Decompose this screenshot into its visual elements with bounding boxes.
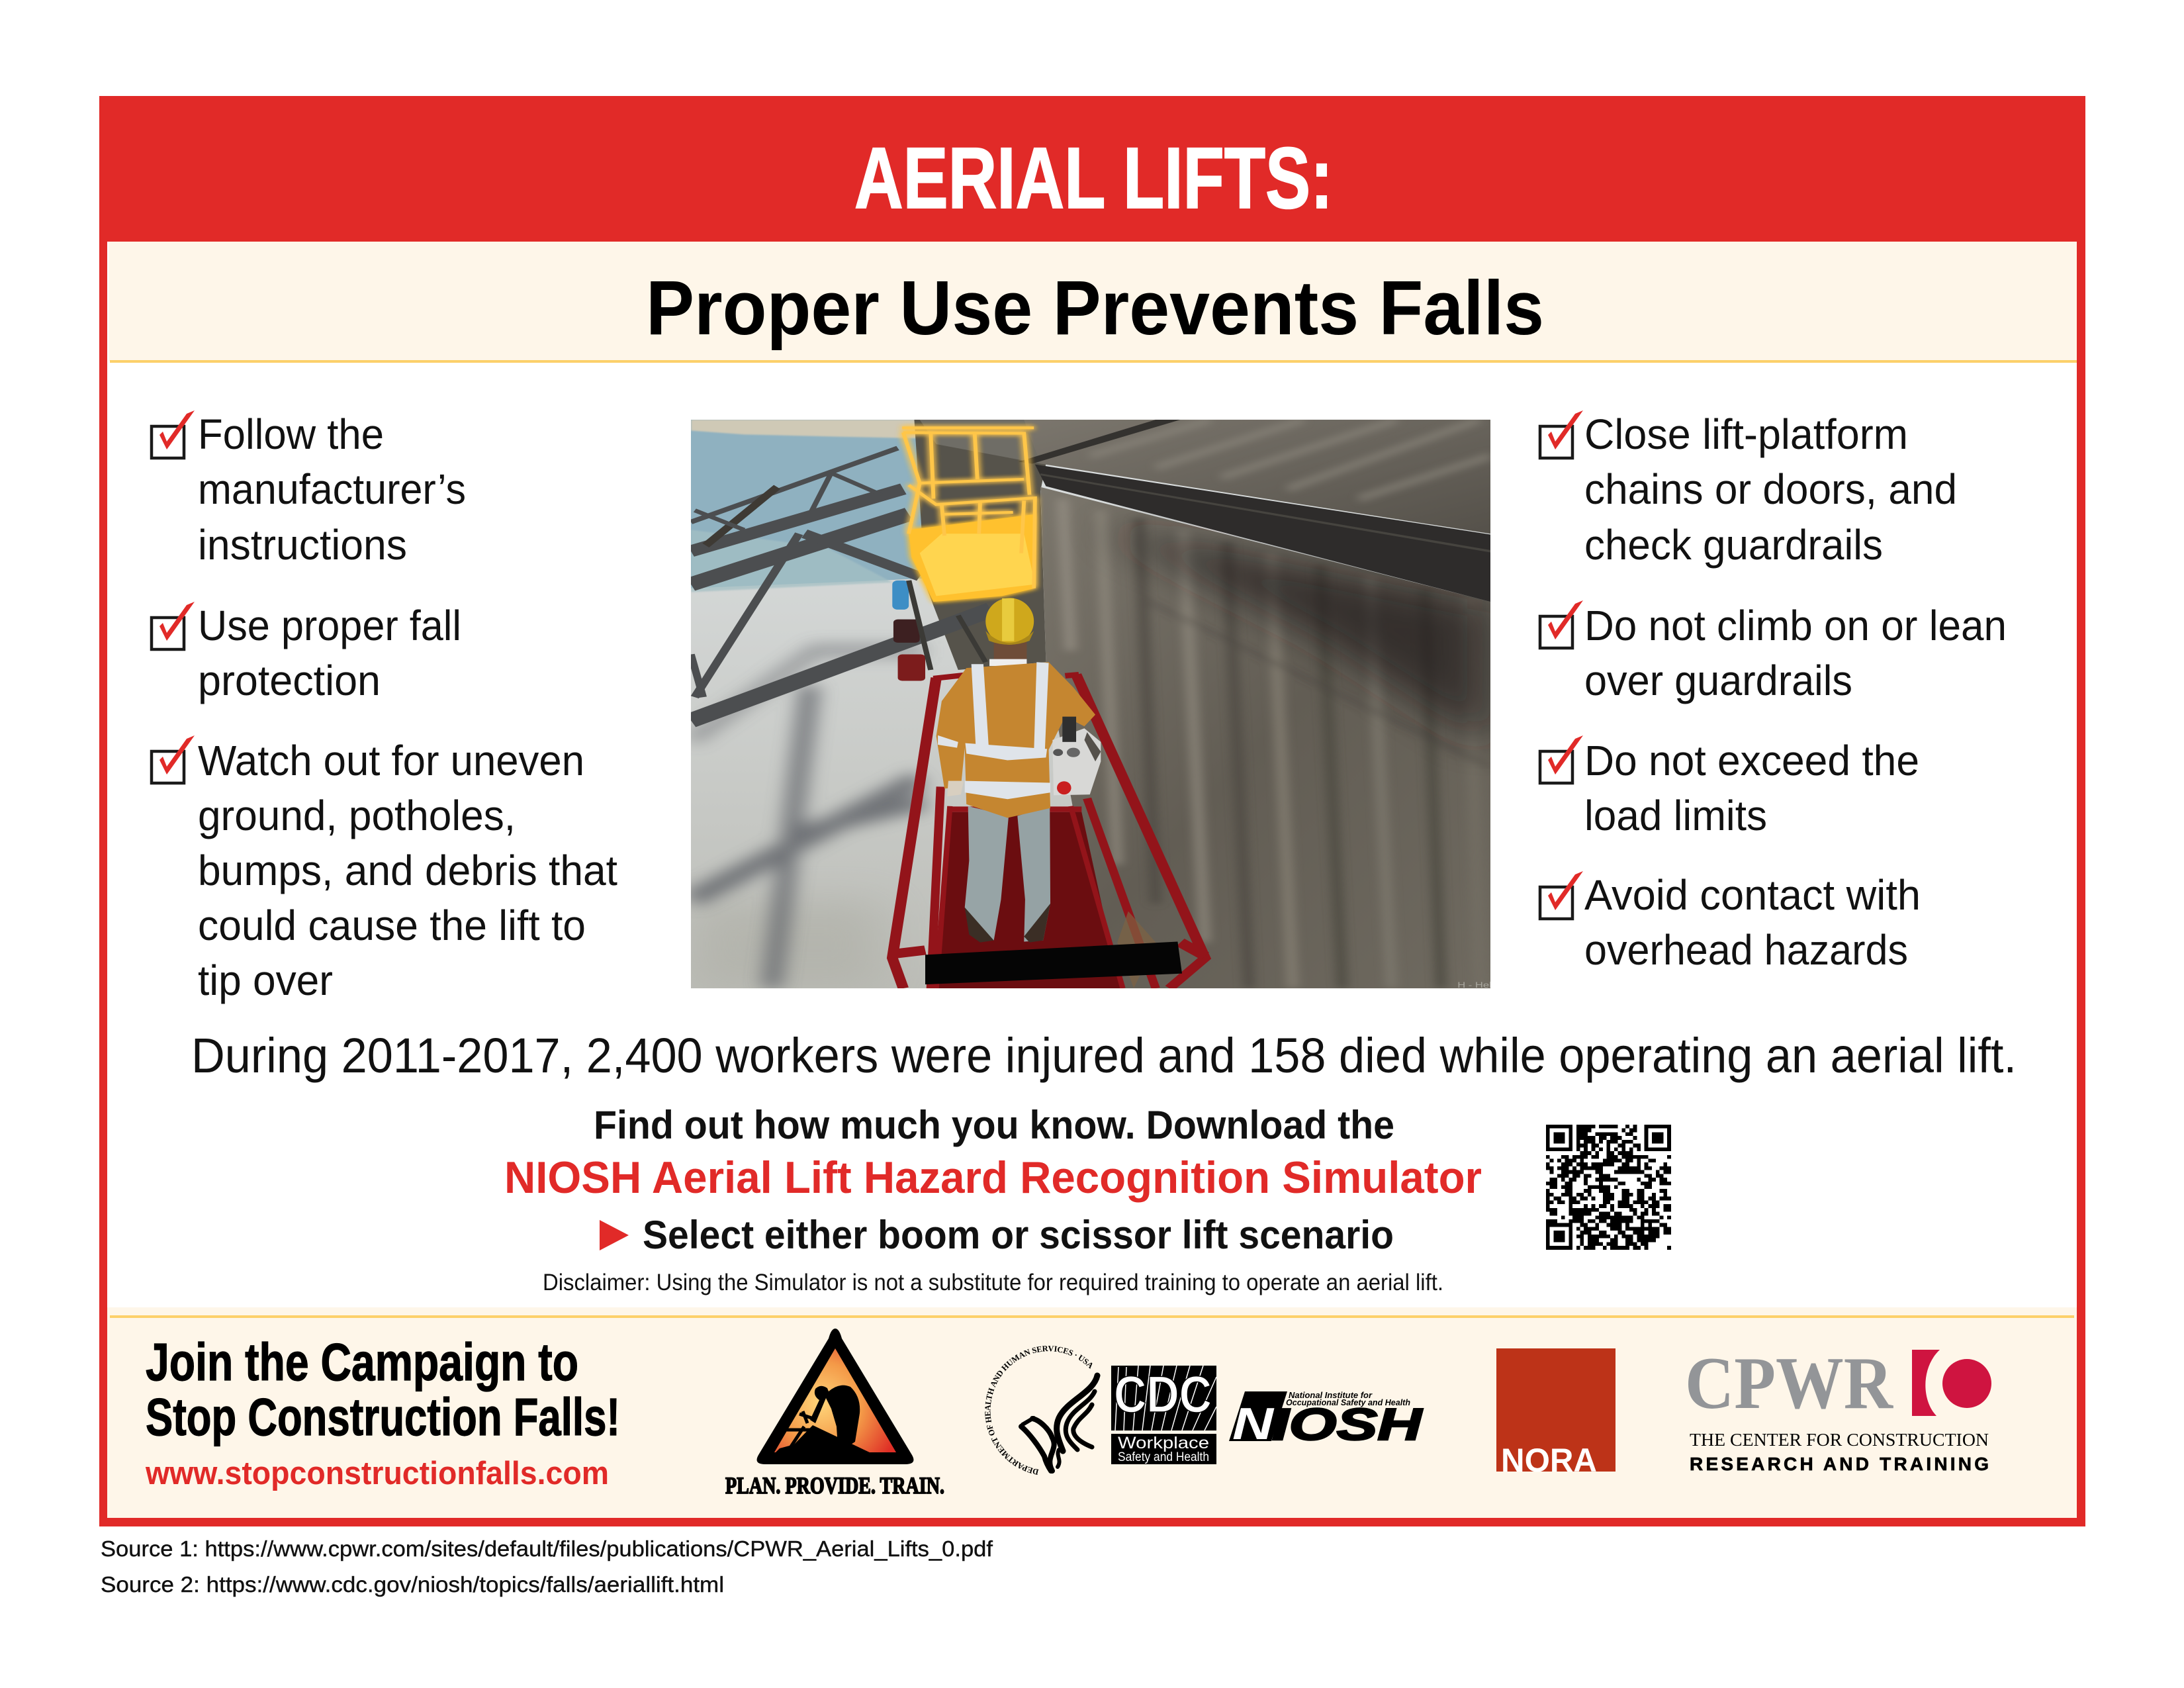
panel: left checklist [152, 410, 617, 1004]
call to action: NIOSH Aerial Lift Hazard Recognition Simulator [504, 1152, 1482, 1203]
item: follow instructions: instructions [198, 521, 407, 569]
logo: CPWR: THE CENTER FOR CONSTRUCTION [1690, 1430, 1989, 1450]
logo: CPWR: CPWR [1685, 1342, 1893, 1425]
outer red frame [99, 96, 2085, 1526]
item: do not climb [1540, 600, 2007, 704]
panel: footer band [107, 1307, 2077, 1518]
QR code [1546, 1125, 1671, 1250]
white content panel [107, 242, 2077, 1518]
item: overhead hazards [1540, 871, 1921, 974]
call to action: Select either boom or scissor lift scenario [643, 1213, 1394, 1257]
item: overhead hazards: overhead hazards [1584, 926, 1908, 974]
campaign text: Stop Construction Falls! [146, 1387, 620, 1446]
logo: NIOSH: Occupational Safety and Health [1286, 1397, 1410, 1407]
control box [1052, 717, 1101, 795]
logo: CDC: CDC [1114, 1365, 1212, 1423]
logo: CPWR [1685, 1342, 1991, 1474]
lift platform [936, 812, 1120, 988]
logo: CDC [1111, 1365, 1216, 1464]
item: close chains [1540, 410, 1957, 569]
statistic statement: During 2011-2017, 2,400 workers were injured and 158 died while operating an aerial lift. [191, 1028, 2017, 1083]
logo: HHS seal: DEPARTMENT OF HEALTH AND HUMAN SERVICES · USA [985, 1346, 1092, 1475]
item: uneven ground: could cause the lift to [198, 902, 586, 949]
campaign text: www.stopconstructionfalls.com [145, 1456, 609, 1491]
logo: NIOSH [1229, 1390, 1424, 1450]
logo: NORA: NORA [1501, 1442, 1597, 1479]
logo: CPWR: RESEARCH AND TRAINING [1690, 1454, 1989, 1474]
header title: AERIAL LIFTS: [854, 129, 1333, 226]
item: fall protection: Use proper fall [198, 602, 461, 649]
logo: NIOSH: IOSH [1272, 1399, 1424, 1450]
item: uneven ground: bumps, and debris that [198, 847, 617, 894]
call to action: Disclaimer: Using the Simulator is not a substitute for required training to operate an aerial lift. [543, 1270, 1443, 1295]
item: uneven ground [152, 735, 617, 1004]
item: load limits: load limits [1584, 792, 1767, 839]
logo: NORA [1496, 1348, 1615, 1479]
item: close chains: Close lift-platform [1584, 410, 1908, 458]
worker [936, 598, 1095, 943]
panel: right checklist [1540, 410, 2007, 974]
item: overhead hazards: Avoid contact with [1584, 871, 1921, 919]
item: follow instructions [152, 410, 466, 569]
item: do not climb: Do not climb on or lean [1584, 602, 2007, 649]
item: do not climb: over guardrails [1584, 657, 1852, 704]
panel: simulator photo: H - Help [1457, 981, 1498, 990]
item: follow instructions: Follow the [198, 410, 384, 458]
item: follow instructions: manufacturer’s [198, 465, 466, 513]
logo: CDC: Safety and Health [1118, 1450, 1209, 1464]
sources: Source 2: https://www.cdc.gov/niosh/topics/falls/aeriallift.html [101, 1572, 724, 1597]
campaign text [145, 1333, 620, 1491]
item: fall protection: protection [198, 657, 381, 704]
logo: CDC: Workplace [1118, 1434, 1209, 1452]
subtitle band: Proper Use Prevents Falls [646, 265, 1544, 351]
logo: NIOSH: National Institute for [1289, 1390, 1373, 1400]
item: load limits [1540, 735, 1919, 839]
item: close chains: chains or doors, and [1584, 465, 1957, 513]
logo: plan provide train [725, 1329, 944, 1499]
panel: simulator photo [691, 420, 1498, 990]
sources: Source 1: https://www.cpwr.com/sites/default/files/publications/CPWR_Aerial_Lifts_0.pdf [101, 1536, 993, 1561]
logo: NIOSH: N [1232, 1399, 1275, 1449]
item: uneven ground: ground, potholes, [198, 792, 516, 839]
call to action: Find out how much you know. Download the [594, 1103, 1394, 1147]
subtitle band [109, 242, 2077, 363]
icon: red arrow [600, 1220, 629, 1250]
logo: plan provide train: PLAN. PROVIDE. TRAIN. [725, 1472, 944, 1499]
sources [101, 1536, 993, 1597]
item: load limits: Do not exceed the [1584, 737, 1919, 784]
item: fall protection [152, 602, 461, 704]
basket glow [902, 428, 1035, 602]
item: close chains: check guardrails [1584, 521, 1883, 569]
campaign text: Join the Campaign to [146, 1333, 578, 1391]
call to action [504, 1103, 1482, 1295]
item: uneven ground: tip over [198, 957, 333, 1004]
item: uneven ground: Watch out for uneven [198, 737, 584, 784]
